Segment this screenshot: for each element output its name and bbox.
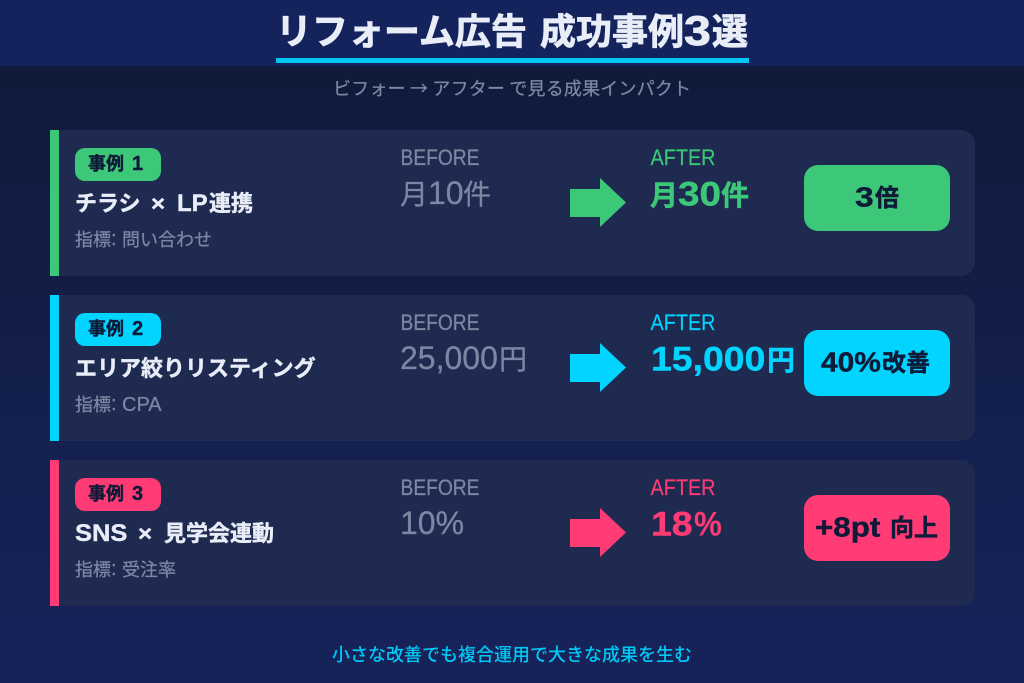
header band	[0, 0, 1024, 66]
case 1 after: AFTER	[650, 145, 716, 170]
case 1 badge	[75, 148, 161, 181]
case 2 badge	[75, 313, 161, 346]
case 1 name: チラシ	[75, 186, 141, 218]
case 3 result	[804, 495, 950, 561]
case 1 name: ×	[151, 191, 165, 216]
subtitle: ビフォー → アフター で見る成果インパクト	[333, 75, 691, 101]
case 1 before: 10	[428, 175, 464, 211]
case 3 name: SNS	[75, 521, 127, 547]
case 2 before	[400, 310, 527, 378]
title: 3	[684, 7, 711, 54]
case 3 metric: 受注率	[122, 556, 176, 582]
case 2 badge: 事例	[88, 315, 124, 341]
case 1 metric: 問い合わせ	[122, 226, 212, 252]
case 1 name: LP	[177, 190, 208, 217]
case 1 before	[400, 145, 491, 213]
case 3 metric: 指標	[75, 556, 111, 582]
case 2 after	[650, 310, 795, 379]
case 3 metric: :	[111, 558, 117, 580]
case 2 result: 40%	[821, 347, 881, 378]
case 2 before: BEFORE	[400, 310, 480, 335]
case 3 name	[75, 516, 274, 548]
case 1 result: 倍	[875, 178, 899, 213]
case 3 result: +8pt	[815, 512, 880, 543]
case 1 after: 月	[650, 174, 678, 214]
case 2 after: AFTER	[650, 310, 716, 335]
case 2 badge: 2	[132, 318, 143, 340]
case 1 after	[650, 145, 749, 214]
case 3 after: %	[694, 504, 722, 543]
case 2 result: 改善	[882, 343, 930, 378]
case 2 metric: 指標	[75, 391, 111, 417]
title: 選	[712, 3, 748, 55]
case 3 badge	[75, 478, 161, 511]
case 1 before: BEFORE	[400, 145, 480, 170]
case 2 metric	[75, 391, 162, 417]
icon: arrow case 2	[570, 343, 626, 392]
panel: case 1	[50, 130, 975, 276]
case 2 metric: :	[111, 393, 117, 415]
case 3 after	[650, 475, 722, 543]
case 1 badge: 事例	[88, 150, 124, 176]
case 1 metric: :	[111, 228, 117, 250]
panel: case 3	[50, 460, 975, 606]
case 2 before: 円	[499, 338, 527, 378]
case 3 before: BEFORE	[400, 475, 480, 500]
case 2 result	[804, 330, 950, 396]
footer message: 小さな改善でも複合運用で大きな成果を生む	[332, 641, 692, 667]
case 3 badge: 事例	[88, 480, 124, 506]
case 3 after: AFTER	[650, 475, 716, 500]
case 3 name: ×	[138, 521, 152, 546]
case 1 name	[75, 186, 253, 218]
title	[276, 3, 749, 63]
case 2 before: 25,000	[400, 340, 498, 376]
case 1 badge: 1	[132, 153, 143, 175]
case 3 before	[400, 475, 480, 541]
title: リフォーム広告	[276, 3, 527, 55]
case 2 after: 円	[767, 339, 795, 379]
case 3 badge: 3	[132, 483, 143, 505]
case 3 before: 10%	[400, 505, 464, 541]
icon: arrow case 3	[570, 508, 626, 557]
case 1 name: 連携	[209, 186, 253, 218]
case 2 name: エリア絞りリスティング	[75, 351, 316, 383]
case 3 name: 見学会連動	[164, 516, 274, 548]
case 1 after: 30	[678, 175, 721, 213]
case 3 result: 向上	[890, 508, 938, 543]
case 1 metric	[75, 226, 212, 252]
case 1 result: 3	[855, 181, 874, 213]
case 1 after: 件	[721, 174, 749, 214]
case 2 after: 15,000	[651, 340, 765, 378]
case 1 metric: 指標	[75, 226, 111, 252]
title: 成功事例	[540, 3, 684, 55]
panel: case 2	[50, 295, 975, 441]
case 2 metric: CPA	[122, 394, 162, 416]
case 1 result	[804, 165, 950, 231]
case 3 after: 18	[651, 505, 693, 543]
icon: arrow case 1	[570, 178, 626, 227]
case 1 before: 件	[463, 173, 491, 213]
case 3 metric	[75, 556, 176, 582]
case 1 before: 月	[400, 173, 428, 213]
